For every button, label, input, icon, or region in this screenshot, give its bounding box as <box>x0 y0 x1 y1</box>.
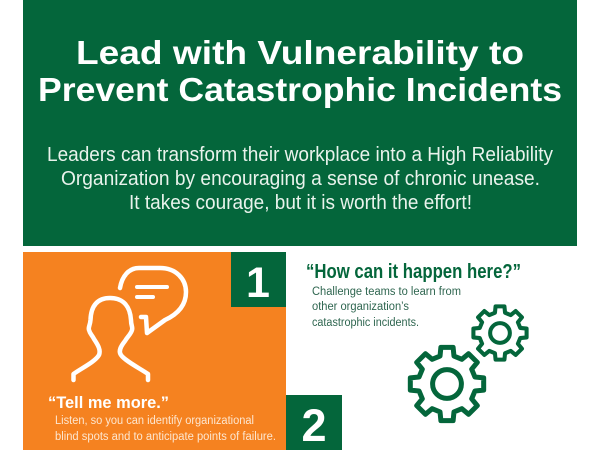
title: Lead with Vulnerability to <box>76 34 524 71</box>
intro text <box>47 144 553 214</box>
text: tell me more body: blind spots and to anticipate points of failure. <box>55 431 276 443</box>
panel: how can it happen here <box>306 261 527 421</box>
number badge 2 <box>286 395 342 450</box>
number badge 2: 2 <box>301 400 327 450</box>
title <box>38 34 562 108</box>
intro text: Leaders can transform their workplace into a High Reliability <box>47 144 553 166</box>
number badge 1 <box>231 252 286 307</box>
panel: tell me more <box>23 252 286 450</box>
heading: tell me more: “Tell me more.” <box>48 394 169 412</box>
text: tell me more body: Listen, so you can identify organizational <box>55 415 254 427</box>
icon: small gear <box>473 306 527 360</box>
text: how can it happen body: catastrophic incidents. <box>312 317 419 329</box>
text: how can it happen body: Challenge teams to learn from <box>312 286 461 298</box>
text: tell me more body <box>55 415 276 443</box>
panel: header <box>23 0 577 246</box>
intro text: Organization by encouraging a sense of chronic unease. <box>61 168 540 190</box>
icon: speech bubble <box>120 268 186 333</box>
text: how can it happen body: other organization’s <box>312 301 409 313</box>
icon: large gear <box>410 347 484 421</box>
number badge 1: 1 <box>246 259 270 307</box>
intro text: It takes courage, but it is worth the effort! <box>129 192 472 214</box>
title: Prevent Catastrophic Incidents <box>38 71 562 108</box>
text: how can it happen body <box>312 286 461 329</box>
heading: how can it happen here: “How can it happen here?” <box>306 261 521 283</box>
icon: person <box>74 298 148 380</box>
